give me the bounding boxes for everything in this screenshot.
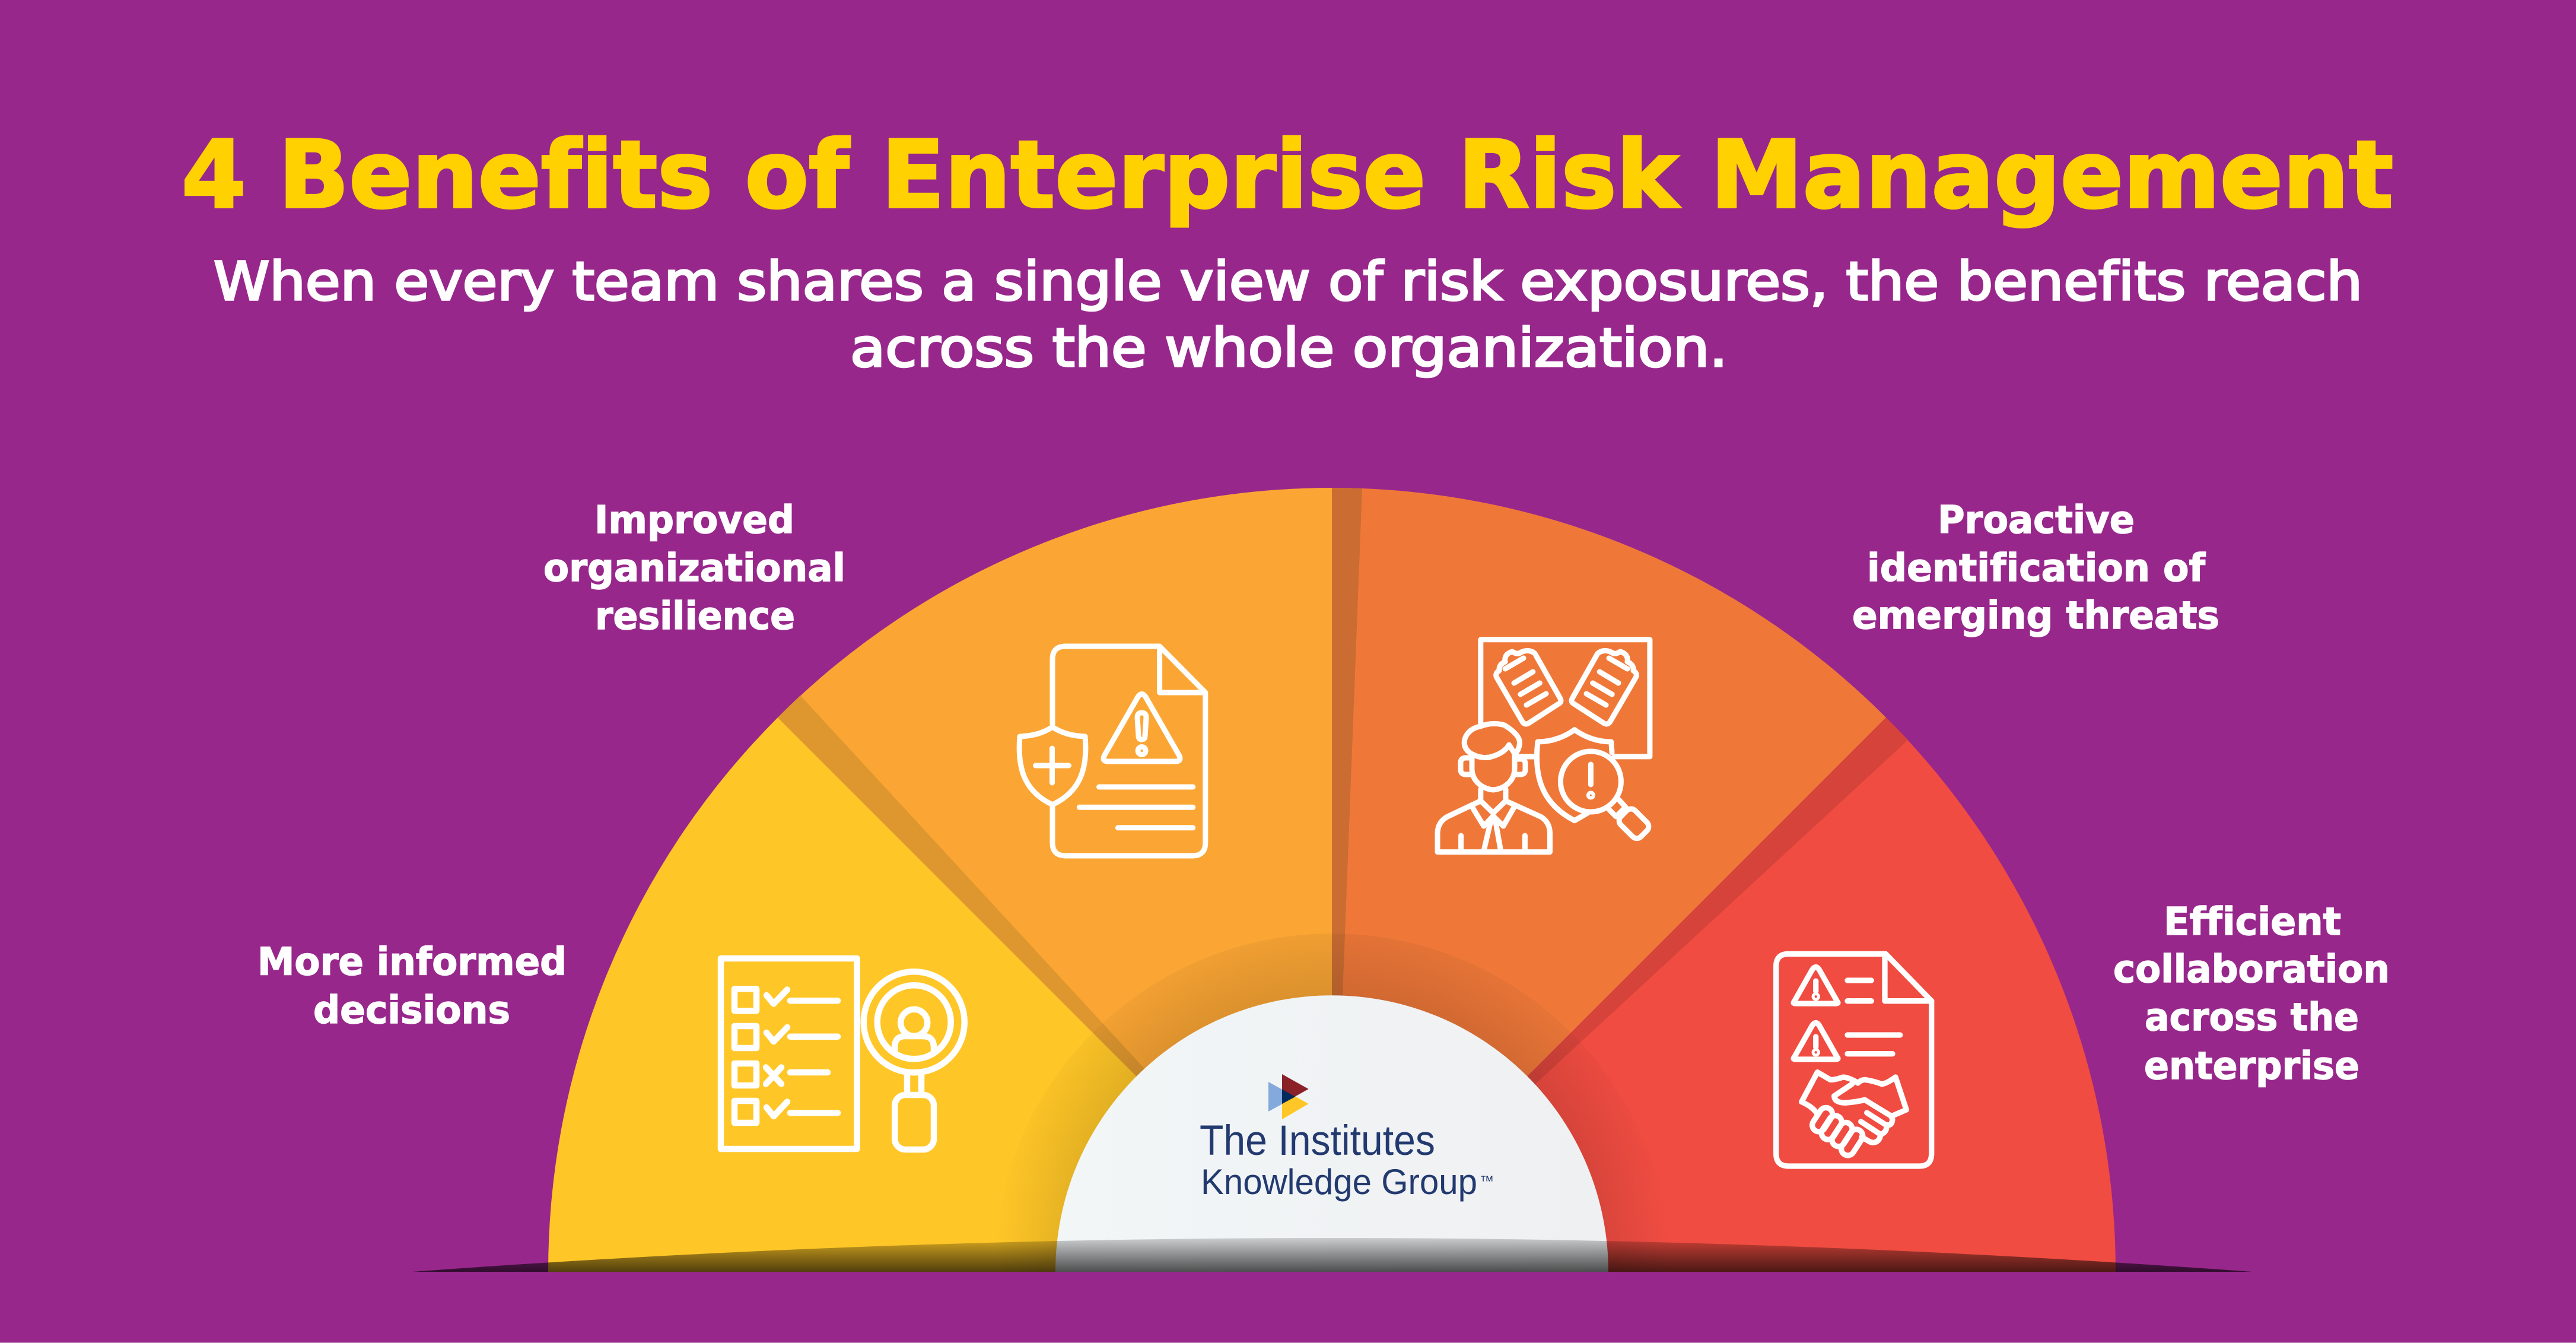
logo mark <box>1268 1074 1309 1119</box>
title: 4 Benefits of Enterprise Risk Management <box>182 121 2393 230</box>
label: More informed decisions: More informed <box>257 940 567 984</box>
label: Improved organizational resilience: Improved <box>594 499 794 542</box>
label: Proactive identification of emerging threats: Proactive <box>1938 499 2135 542</box>
gauge semicircle <box>548 488 2116 1272</box>
icon: document with shield and warning <box>1019 646 1206 856</box>
inner halo <box>994 934 1670 1272</box>
logo wordmark: Knowledge Group <box>1201 1162 1477 1202</box>
label: Improved organizational resilience <box>543 499 845 639</box>
label: Proactive identification of emerging threats <box>1852 499 2219 638</box>
logo wordmark <box>1200 1117 1494 1202</box>
segment: deep orange <box>1332 488 1886 1272</box>
ground shadow <box>412 1238 2252 1272</box>
icon: document with warnings and handshake <box>1776 954 1932 1166</box>
centre hub <box>1055 995 1608 1272</box>
label: More informed decisions: decisions <box>313 989 510 1033</box>
right clipboard <box>1572 650 1636 724</box>
subtitle: across the whole organization. <box>850 317 1728 379</box>
logo wordmark: ™ <box>1480 1173 1494 1189</box>
label: Efficient collaboration across the enterprise: collaboration <box>2113 948 2390 992</box>
icon: checklist and magnifier <box>721 958 965 1150</box>
logo <box>1200 1074 1494 1202</box>
left clipboard <box>1496 650 1561 724</box>
label: Improved organizational resilience: resilience <box>595 595 795 639</box>
person <box>1438 723 1550 852</box>
subtitle <box>214 250 2362 379</box>
label: Improved organizational resilience: organizational <box>543 547 845 590</box>
label: Efficient collaboration across the enterprise <box>2113 900 2390 1088</box>
shield <box>1537 730 1612 821</box>
label: More informed decisions <box>257 940 567 1033</box>
segment shadow: right <box>1332 717 1908 1272</box>
warning triangle 2 <box>1793 1023 1838 1059</box>
segment: red <box>1332 717 2116 1272</box>
board <box>1481 640 1650 757</box>
segment: light orange <box>778 488 1332 1272</box>
segment shadow: top <box>1332 488 1362 1272</box>
label: Efficient collaboration across the enterprise: enterprise <box>2144 1044 2359 1088</box>
segment: yellow <box>548 717 1332 1272</box>
label: Efficient collaboration across the enterprise: Efficient <box>2164 900 2341 944</box>
warning triangle 1 <box>1793 967 1838 1004</box>
magnifier <box>1560 751 1651 841</box>
handshake <box>1802 1072 1906 1158</box>
label: Proactive identification of emerging threats: emerging threats <box>1852 594 2219 638</box>
label: Proactive identification of emerging threats: identification of <box>1867 547 2206 590</box>
label: Efficient collaboration across the enterprise: across the <box>2145 996 2359 1040</box>
segment shadow: left <box>778 696 1332 1272</box>
icon: analyst with board and magnifier <box>1438 640 1651 852</box>
subtitle: When every team shares a single view of risk exposures, the benefits reach <box>214 250 2362 312</box>
logo wordmark: The Institutes <box>1200 1117 1435 1164</box>
